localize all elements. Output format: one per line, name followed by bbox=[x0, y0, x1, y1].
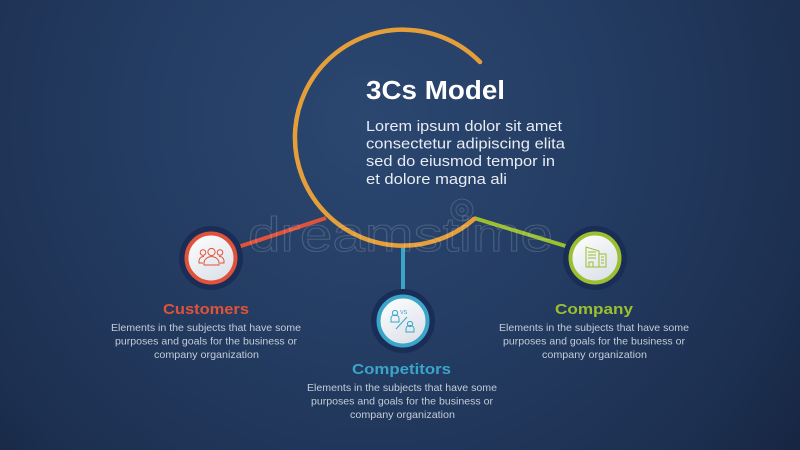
text: competitors bbox=[307, 383, 497, 421]
label: company: Company bbox=[555, 301, 634, 318]
node: company bbox=[563, 226, 627, 290]
text: customers bbox=[111, 323, 301, 361]
node: customers bbox=[179, 226, 243, 290]
main orange ring bbox=[295, 30, 480, 246]
description bbox=[366, 119, 566, 188]
text: customers: company organization bbox=[154, 350, 259, 361]
text: company: purposes and goals for the business or bbox=[503, 336, 686, 348]
label: customers: Customers bbox=[163, 301, 249, 318]
icon: person vs person: VS bbox=[400, 310, 408, 316]
icon: office building bbox=[586, 247, 606, 267]
text: competitors: purposes and goals for the business or bbox=[311, 396, 494, 408]
watermark bbox=[248, 199, 553, 262]
text: competitors: Elements in the subjects that have some bbox=[307, 383, 497, 394]
description: sed do eiusmod tempor in bbox=[366, 154, 555, 170]
label: competitors: Competitors bbox=[352, 361, 451, 378]
text: customers: purposes and goals for the business or bbox=[115, 336, 298, 348]
connector: competitors bbox=[401, 246, 405, 296]
watermark: dreamstime bbox=[248, 209, 553, 262]
text: customers: Elements in the subjects that have some bbox=[111, 323, 301, 334]
description: Lorem ipsum dolor sit amet bbox=[366, 119, 562, 135]
connector: company bbox=[474, 218, 572, 248]
node: competitors bbox=[371, 289, 435, 353]
text: company: Elements in the subjects that have some bbox=[499, 323, 689, 334]
text: competitors: company organization bbox=[350, 410, 455, 421]
icon: people group bbox=[199, 248, 224, 265]
text: company bbox=[499, 323, 689, 361]
text: company: company organization bbox=[542, 350, 647, 361]
connector: customers bbox=[235, 218, 326, 248]
description: et dolore magna ali bbox=[366, 172, 507, 188]
title: 3Cs Model bbox=[366, 77, 505, 105]
description: consectetur adipiscing elita bbox=[366, 136, 566, 152]
